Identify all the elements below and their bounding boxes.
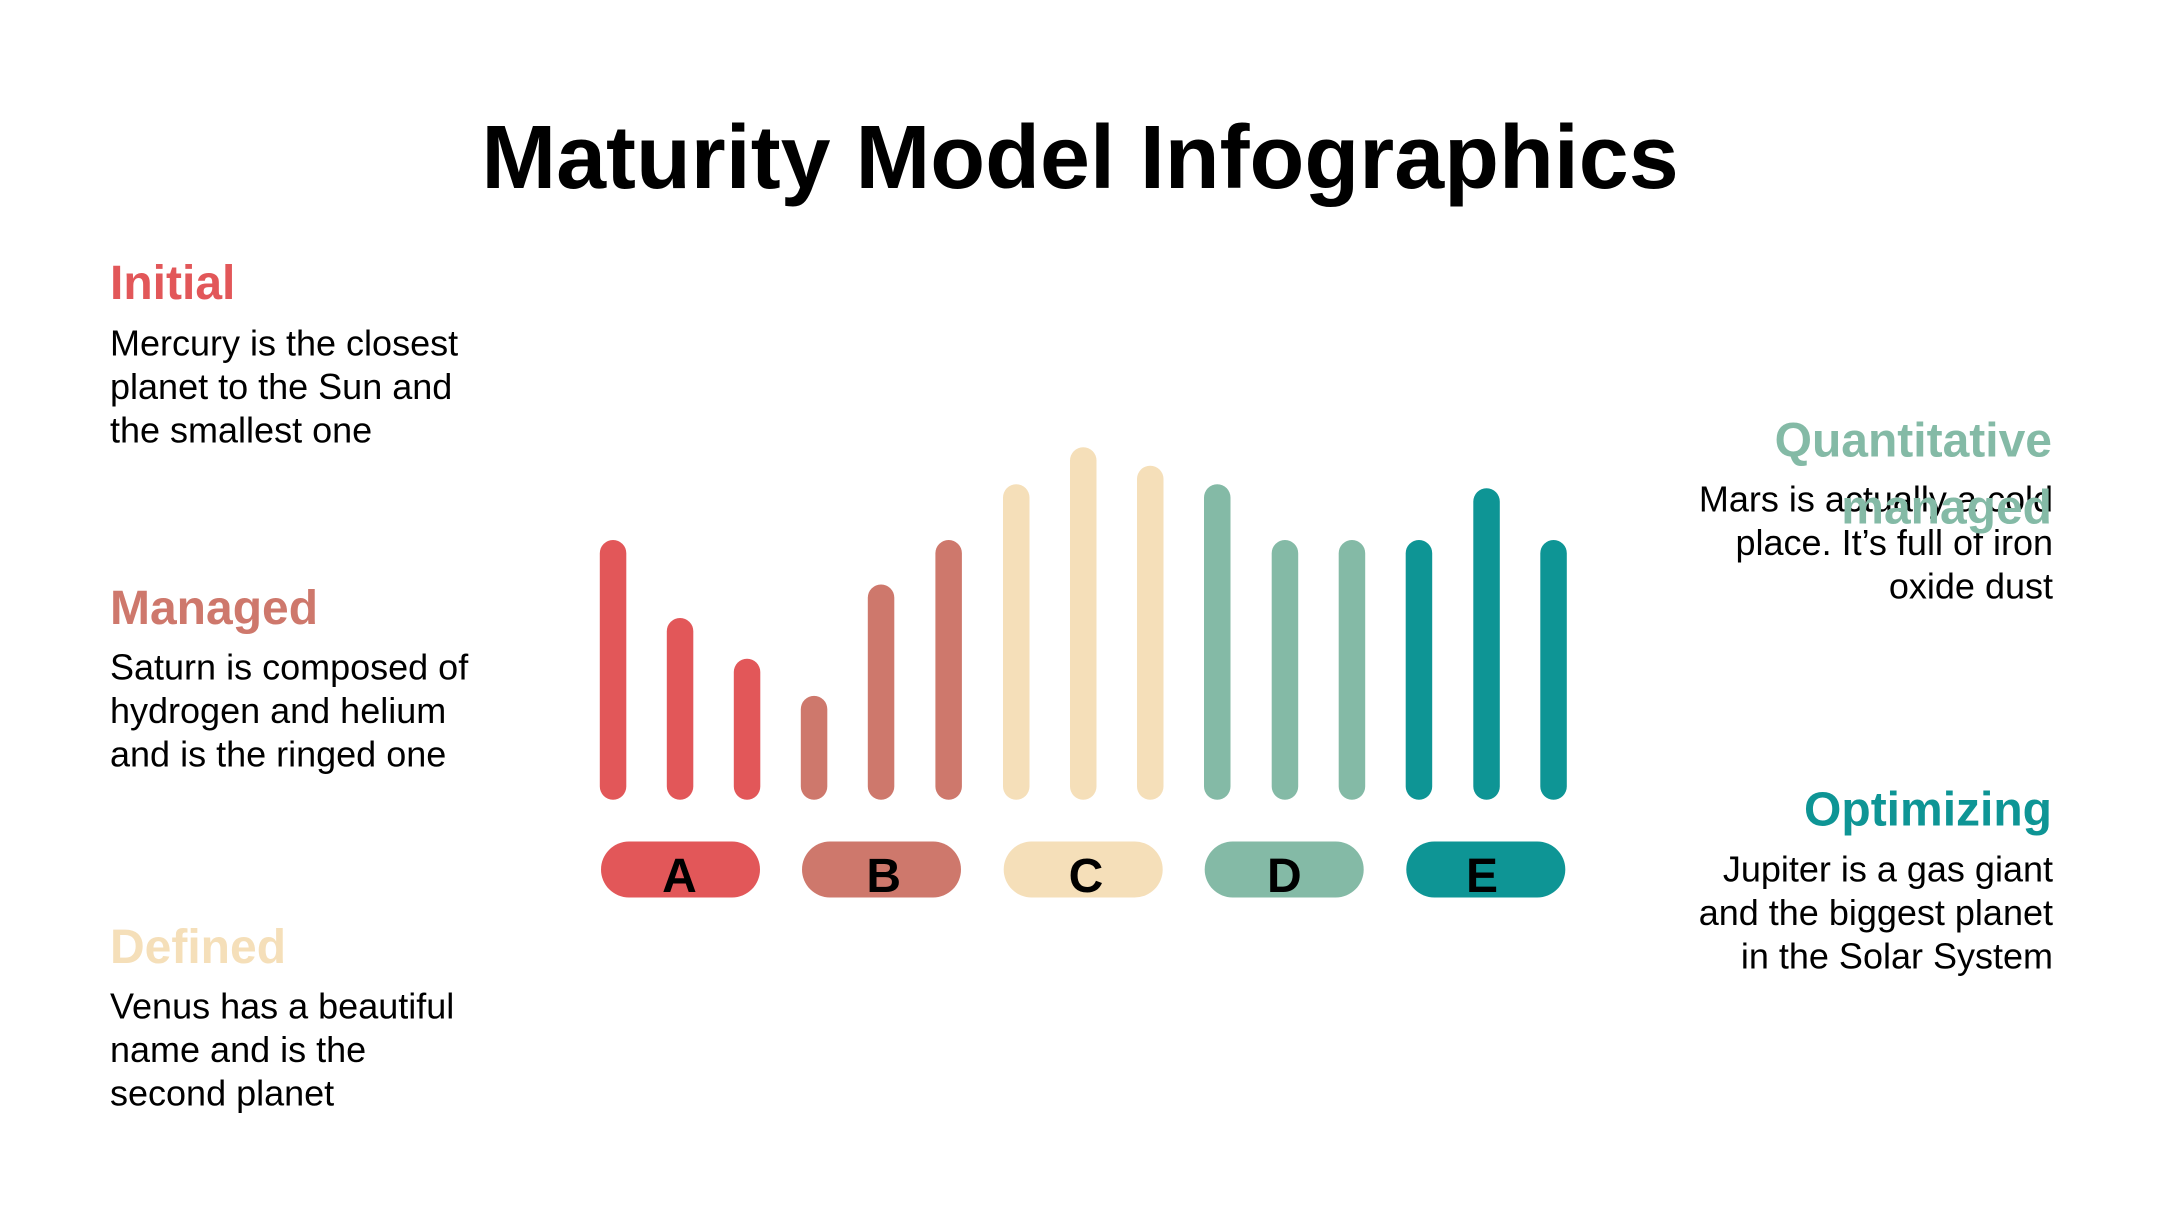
text: Defined description: Venus has a beautiful — [110, 986, 454, 1026]
text: Managed description: and is the ringed one — [110, 734, 446, 774]
label pill: B — [802, 842, 961, 903]
heading: Quantitative managed: managed — [1841, 482, 2052, 534]
text: Optimizing description: in the Solar System — [1741, 936, 2053, 976]
label pill: D: D — [1267, 850, 1302, 903]
heading: Quantitative managed — [1775, 414, 2052, 534]
text: Defined description: second planet — [110, 1072, 334, 1114]
label pill: B: B — [866, 850, 901, 903]
text: Managed description: hydrogen and helium — [110, 690, 446, 731]
text: Initial description: Mercury is the closest — [110, 322, 458, 364]
text: Initial description: the smallest one — [110, 410, 372, 450]
panel: Initial — [110, 257, 458, 450]
label pill: A: A — [662, 850, 697, 903]
heading: Optimizing: Optimizing — [1804, 784, 2052, 836]
text: Managed description — [110, 646, 469, 774]
label pill: A — [601, 842, 760, 903]
text: Optimizing description — [1699, 848, 2053, 976]
text: Quantitative managed description: oxide dust — [1889, 566, 2053, 606]
text: Managed description: Saturn is composed of — [110, 646, 469, 688]
bar chart — [600, 447, 1567, 800]
text: Quantitative managed description: place. It’s full of iron — [1736, 522, 2053, 563]
label pill: C: C — [1069, 850, 1103, 903]
label pill: E: E — [1466, 850, 1498, 903]
text: Quantitative managed description: Mars is actually a cold — [1699, 478, 2053, 520]
label pill: C — [1004, 842, 1163, 903]
label pill: D — [1205, 842, 1364, 903]
label pill: E — [1406, 842, 1565, 903]
text: Defined description — [110, 986, 454, 1114]
heading: Managed: Managed — [110, 582, 318, 635]
text: Optimizing description: and the biggest planet — [1699, 892, 2053, 933]
text: Initial description: planet to the Sun and — [110, 366, 452, 407]
bars: group B — [801, 540, 962, 800]
bars: group D — [1204, 484, 1365, 800]
heading: Defined: Defined — [110, 921, 286, 974]
bars: group C — [1003, 447, 1164, 800]
heading: Quantitative managed: Quantitative — [1775, 414, 2052, 468]
panel: Optimizing — [1699, 784, 2053, 976]
panel: Quantitative managed — [1699, 414, 2053, 606]
heading: Initial: Initial — [110, 257, 235, 310]
panel: Managed — [110, 582, 469, 774]
text: Optimizing description: Jupiter is a gas giant — [1723, 848, 2053, 890]
panel: Defined — [110, 921, 454, 1114]
title: Maturity Model Infographics — [481, 108, 1679, 208]
text: Initial description — [110, 322, 458, 450]
bars: group A — [600, 540, 760, 800]
text: Defined description: name and is the — [110, 1029, 366, 1070]
bars: group E — [1406, 488, 1567, 800]
text: Quantitative managed description — [1699, 478, 2053, 606]
